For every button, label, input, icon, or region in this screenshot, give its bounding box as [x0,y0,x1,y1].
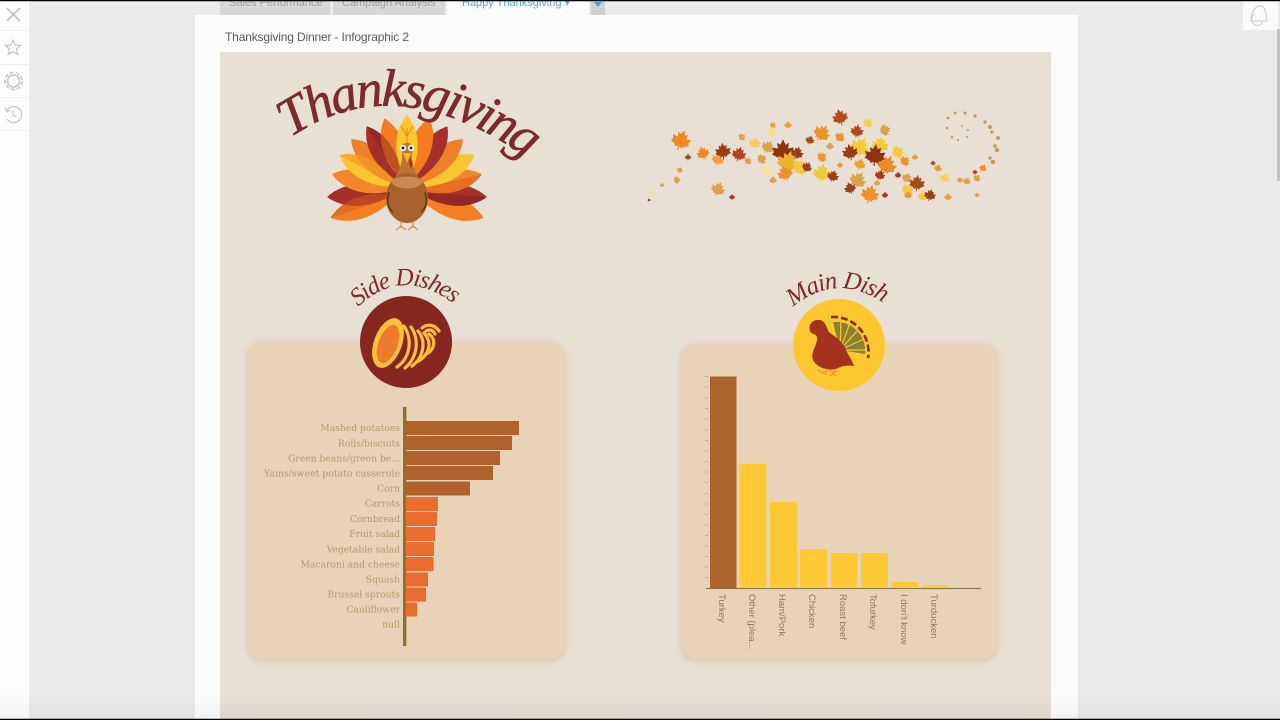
bar chart: main dish [705,376,981,649]
category labels: Cauliflower [346,604,401,616]
category labels: Tofurkey [867,594,878,630]
feet [396,222,418,230]
bar chart: side dishes [263,407,519,646]
tab bar [220,0,605,16]
category labels: Brussel sprouts [327,590,400,600]
category labels: Ham/Pork [776,594,787,636]
axis and ticks [706,588,981,590]
icon: turkey illustration [326,115,488,230]
tab: dropdown [591,0,605,15]
category labels: Roast beef [837,594,848,640]
category labels: Turkey [716,594,727,623]
bars [710,376,736,588]
icon: star [6,40,20,54]
heading: Side Dishes: Side Dishes [351,268,460,306]
body [386,173,428,223]
category labels: Turducken [928,594,939,639]
report title: Thanksgiving Dinner - Infographic 2 [225,30,409,44]
panel: side dishes [244,268,568,664]
tail feathers [326,115,488,228]
category labels: Green beans/green be... [288,454,400,464]
panel: main dish [678,272,1000,664]
category labels: Chicken [806,594,817,628]
category labels [716,594,939,649]
tab: Campaign Analysis [333,0,445,15]
icon: cornucopia [360,296,452,388]
category labels: Squash [366,574,400,586]
left toolbar [0,0,29,720]
beak and wattle [403,153,411,163]
autumn leaf swirl [647,107,1000,206]
report panel [195,15,1078,720]
category labels: Vegetable salad [326,544,400,556]
axis [403,407,406,646]
icon: settings [5,72,22,90]
icon: close [7,8,20,21]
infographic canvas [220,52,1051,720]
category labels: null [382,620,400,630]
heading: Main Dish: Main Dish [786,272,888,307]
category labels: Fruit salad [349,529,400,540]
icon: notifications box [1243,1,1278,30]
neck and head [394,143,420,180]
category labels: Corn [377,484,400,494]
eyes [400,145,414,151]
scrollbar [1277,29,1280,181]
icon: history [5,107,22,123]
category labels [263,423,401,630]
category labels: Rolls/biscuits [338,438,400,450]
bars [406,421,519,496]
tab: Sales Performance [220,0,330,15]
category labels: Carrots [365,498,400,510]
tab: Happy Thanksgiving [447,0,589,16]
icon: turkey badge [793,299,885,391]
comb [401,126,413,143]
heading: Thanksgiving: Thanksgiving [276,68,540,160]
category labels: Macaroni and cheese [300,560,400,570]
category labels: Mashed potatoes [320,423,400,434]
category labels: Yams/sweet potato casserole [263,468,400,480]
swirl tail [946,112,1000,164]
category labels: Other (plea... [746,594,757,649]
category labels: I don't know [898,594,909,645]
category labels: Cornbread [350,514,400,525]
